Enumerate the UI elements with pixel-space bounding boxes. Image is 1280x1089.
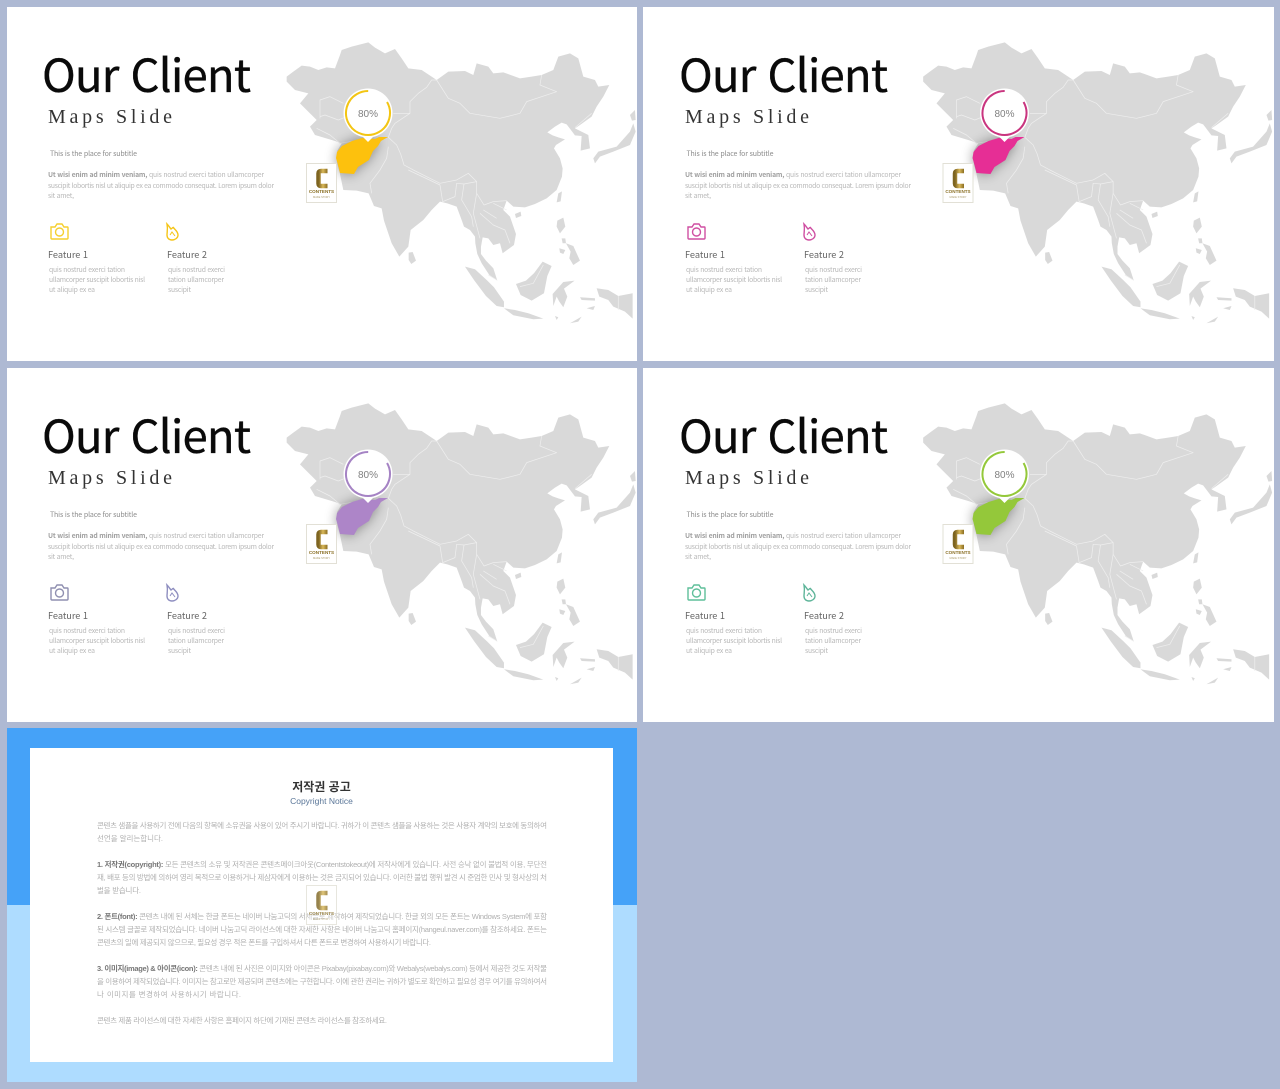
feature 1 <box>48 608 145 655</box>
notice section 3: 3. 이미지(image) & 아이콘(icon): 콘텐츠 내에 된 사진은 이미지와 아이콘은 Pixabay(pixabay.com)와 Webalys(webalys.com) 등에서 제공한 것도 저작물 <box>97 963 547 973</box>
text block: Ut wisi enim ad minim veniam, quis nostrud exerci tation ullamcorper <box>685 530 901 540</box>
logo: CONTENTS <box>945 550 971 555</box>
feature 2: Feature 2 <box>804 247 844 261</box>
feature 2: suscipit <box>805 645 828 655</box>
feature 1: ullamcorper suscipit lobortis nisl <box>49 274 145 284</box>
feature 2: suscipit <box>168 284 191 294</box>
logo: MAKE STORY <box>313 195 330 199</box>
notice intro: 콘텐츠 샘플을 사용하기 전에 다음의 항목에 소유권을 사용이 있어 주시기 바랍니다. 귀하가 이 콘텐츠 샘플을 사용하는 것은 사용자 계약의 보호에 동의하여 <box>97 820 547 830</box>
pin with progress ring: 80% <box>994 470 1015 481</box>
logo <box>943 164 973 202</box>
text block: suscipit lobortis nisl ut aliquip ex ea commodo consequat. Lorem ipsum dolor <box>48 180 274 190</box>
icon: flame <box>167 224 178 240</box>
icon: camera <box>688 585 705 600</box>
text block: This is the place for subtitle <box>50 149 137 159</box>
feature 2: quis nostrud exerci <box>805 625 862 635</box>
panel: magenta map slide <box>643 7 1274 361</box>
text block: suscipit lobortis nisl ut aliquip ex ea commodo consequat. Lorem ipsum dolor <box>685 180 911 190</box>
subtitle heading: Maps Slide <box>685 467 809 489</box>
text block <box>685 510 911 561</box>
title: Our Client <box>42 40 251 106</box>
text block: suscipit lobortis nisl ut aliquip ex ea commodo consequat. Lorem ipsum dolor <box>685 541 911 551</box>
text block <box>48 510 274 561</box>
notice section 1: 1. 저작권(copyright): 모든 콘텐츠의 소유 및 저작권은 콘텐츠메이크아웃(Contentstokeout)에 저작사에게 있습니다. 사전 승낙 없이 불법적 이용, 무단전 <box>97 859 547 869</box>
highlighted country shadow <box>336 499 378 535</box>
feature 2: quis nostrud exerci <box>805 264 862 274</box>
pin with progress ring <box>974 444 1035 504</box>
pin with progress ring: 80% <box>358 109 378 120</box>
logo: MAKE STORY <box>950 195 967 199</box>
panel: green map slide <box>643 368 1274 722</box>
icon: flame <box>804 224 815 240</box>
logo: CONTENTS <box>309 189 334 194</box>
feature 2: quis nostrud exerci <box>168 264 225 274</box>
logo <box>943 524 973 564</box>
feature 2: tation ullamcorper <box>168 274 224 284</box>
icon: flame <box>804 585 815 601</box>
notice section 2: 된 시스템 글꼴로 제작되었습니다. 네이버 나눔고딕 라이선스에 대한 자세한 사항은 네이버 나눔고딕 홈페이지(hangeul.naver.com)를 참조하세요. 폰트는 <box>97 924 547 934</box>
map of Asia <box>923 403 1272 684</box>
logo watermark: MAKE STORY <box>313 917 330 921</box>
pin with progress ring: 80% <box>358 470 378 481</box>
text block: sit amet, <box>48 190 74 200</box>
notice section 1 <box>97 859 547 895</box>
text block <box>685 149 911 200</box>
highlighted country <box>336 137 388 174</box>
highlighted country shadow <box>972 138 1014 174</box>
feature 1: ullamcorper suscipit lobortis nisl <box>686 635 782 645</box>
panel: yellow map slide <box>7 7 637 361</box>
map of Asia <box>923 42 1272 323</box>
feature 1 <box>48 247 145 294</box>
feature 1: Feature 1 <box>685 247 725 261</box>
title: Our Client <box>42 401 251 467</box>
feature 2: suscipit <box>168 645 191 655</box>
icon: camera <box>688 224 705 239</box>
text block: This is the place for subtitle <box>686 149 774 159</box>
feature 1: quis nostrud exerci tation <box>49 264 125 274</box>
feature 1: Feature 1 <box>48 608 88 622</box>
feature 1 <box>685 608 782 655</box>
feature 2 <box>167 247 225 294</box>
feature 2 <box>167 608 225 655</box>
title: Our Client <box>679 401 888 467</box>
text block: Ut wisi enim ad minim veniam, quis nostrud exerci tation ullamcorper <box>48 169 264 179</box>
panel: copyright notice <box>7 728 637 1082</box>
text block: Ut wisi enim ad minim veniam, quis nostrud exerci tation ullamcorper <box>685 169 901 179</box>
logo: MAKE STORY <box>313 556 330 560</box>
pin with progress ring <box>974 83 1035 143</box>
text block: This is the place for subtitle <box>50 510 137 520</box>
logo: CONTENTS <box>309 550 334 555</box>
feature 1: ullamcorper suscipit lobortis nisl <box>686 274 782 284</box>
feature 2: tation ullamcorper <box>805 635 861 645</box>
notice section 2 <box>97 911 547 947</box>
feature 1: ullamcorper suscipit lobortis nisl <box>49 635 145 645</box>
logo: CONTENTS <box>945 189 971 194</box>
highlighted country <box>972 498 1024 535</box>
pin with progress ring: 80% <box>994 109 1015 120</box>
logo watermark <box>306 886 336 924</box>
feature 2: tation ullamcorper <box>805 274 861 284</box>
text block: This is the place for subtitle <box>686 510 774 520</box>
notice section 2: 2. 폰트(font): 콘텐츠 내에 된 서체는 한글 폰트는 네이버 나눔고딕의 서체들로 제작하여 제작되었습니다. 한글 외의 모든 폰트는 Windows System에 포함 <box>97 911 547 921</box>
map of Asia <box>287 403 636 684</box>
highlighted country shadow <box>972 499 1014 535</box>
notice heading: 저작권 공고 <box>292 779 351 794</box>
notice section 1: 벌을 받습니다. <box>97 885 141 895</box>
text block: Ut wisi enim ad minim veniam, quis nostrud exerci tation ullamcorper <box>48 530 264 540</box>
map of Asia <box>287 42 636 323</box>
logo <box>306 164 336 202</box>
feature 1: ut aliquip ex ea <box>49 284 95 294</box>
panel: purple map slide <box>7 368 637 722</box>
feature 2: Feature 2 <box>804 608 844 622</box>
notice subheading: Copyright Notice <box>290 796 353 806</box>
feature 1: ut aliquip ex ea <box>686 645 732 655</box>
pin with progress ring <box>338 444 398 504</box>
feature 2: Feature 2 <box>167 247 207 261</box>
icon: flame <box>167 585 178 601</box>
subtitle heading: Maps Slide <box>48 106 172 128</box>
notice section 3: 을 이용하여 제작되었습니다. 이미지는 참고로만 제공되며 콘텐츠에는 구현합니다. 이에 관한 권리는 귀하가 별도로 확인하고 필요성 경우 여기를 유의하여서 <box>97 976 547 986</box>
feature 2: tation ullamcorper <box>168 635 224 645</box>
feature 1 <box>685 247 782 294</box>
feature 1: ut aliquip ex ea <box>686 284 732 294</box>
logo <box>306 524 336 564</box>
notice section 3 <box>97 963 547 999</box>
notice closing line: 콘텐츠 제품 라이선스에 대한 자세한 사항은 홈페이지 하단에 기재된 콘텐츠 라이선스를 참조하세요. <box>97 1015 387 1025</box>
logo watermark: CONTENTS <box>309 911 334 916</box>
feature 1: quis nostrud exerci tation <box>686 264 762 274</box>
feature 2: quis nostrud exerci <box>168 625 225 635</box>
icon: camera <box>51 585 68 600</box>
feature 2 <box>804 608 862 655</box>
feature 2: Feature 2 <box>167 608 207 622</box>
subtitle heading: Maps Slide <box>48 467 172 489</box>
feature 1: Feature 1 <box>48 247 88 261</box>
notice intro: 선언을 알리는합니다. <box>97 833 163 843</box>
feature 2 <box>804 247 862 294</box>
subtitle heading: Maps Slide <box>685 106 809 128</box>
feature 1: quis nostrud exerci tation <box>686 625 762 635</box>
highlighted country <box>972 137 1024 174</box>
text block: sit amet, <box>685 551 711 561</box>
text block <box>48 149 274 200</box>
feature 1: quis nostrud exerci tation <box>49 625 125 635</box>
feature 1: Feature 1 <box>685 608 725 622</box>
text block: suscipit lobortis nisl ut aliquip ex ea commodo consequat. Lorem ipsum dolor <box>48 541 274 551</box>
highlighted country shadow <box>336 138 378 174</box>
highlighted country <box>336 498 388 535</box>
title: Our Client <box>679 40 888 106</box>
pin with progress ring <box>338 83 398 143</box>
text block: sit amet, <box>685 190 711 200</box>
feature 2: suscipit <box>805 284 828 294</box>
logo: MAKE STORY <box>950 556 967 560</box>
notice section 2: 콘텐츠의 일에 제공되지 않으므로, 필요성 경우 적은 폰트를 구입하셔서 다른 폰트로 변경하여 사용하시기 바랍니다. <box>97 937 431 947</box>
notice intro <box>97 820 547 843</box>
icon: camera <box>51 224 68 239</box>
notice section 3: 나 이미지를 변경하여 사용하시기 바랍니다. <box>97 989 241 999</box>
feature 1: ut aliquip ex ea <box>49 645 95 655</box>
text block: sit amet, <box>48 551 74 561</box>
notice section 1: 재, 배포 등의 방법에 의하여 영리 목적으로 이용하거나 제삼자에게 이용하는 것은 금지되어 있습니다. 이러한 불법 행위 발견 시 준엄한 민사 및 형사상의 처 <box>97 872 547 882</box>
